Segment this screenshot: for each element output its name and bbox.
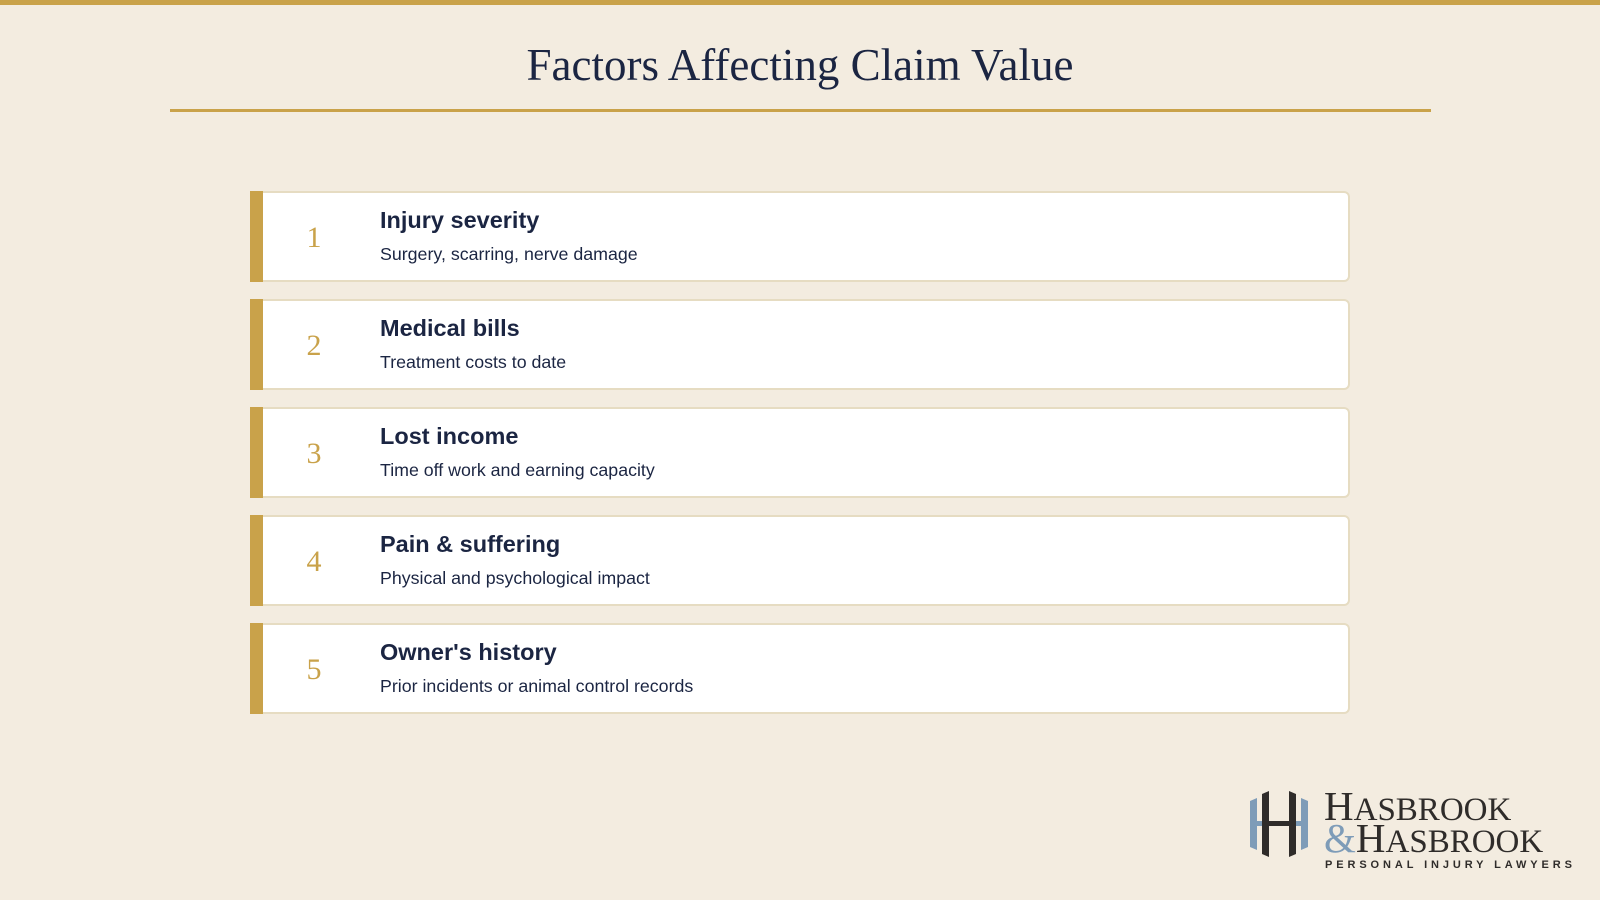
row 4 <box>250 515 1350 606</box>
row 2: Medical bills <box>380 315 520 341</box>
row 3: Lost income <box>380 423 518 449</box>
top accent bar <box>0 0 1600 5</box>
row 5: Owner's history <box>380 639 557 665</box>
row 3: Time off work and earning capacity <box>380 460 655 480</box>
logo text: HASBROOK <box>1324 783 1511 829</box>
row 5: 5 <box>306 653 322 686</box>
logo: &HASBROOK <box>1324 815 1543 861</box>
title underline <box>170 109 1431 112</box>
row 1: Surgery, scarring, nerve damage <box>380 244 638 264</box>
row 1: 1 <box>306 221 322 254</box>
row 4: 4 <box>306 545 322 578</box>
row 4: Pain & suffering <box>380 531 560 557</box>
row 3 <box>250 407 1350 498</box>
row 1: Injury severity <box>380 207 539 233</box>
icon: HH monogram <box>1250 791 1308 857</box>
logo: PERSONAL INJURY LAWYERS <box>1325 859 1576 871</box>
row 2: 2 <box>306 329 322 362</box>
row 2 <box>250 299 1350 390</box>
row 3: 3 <box>306 437 322 470</box>
title: Factors Affecting Claim Value <box>526 40 1074 90</box>
row 2: Treatment costs to date <box>380 352 566 372</box>
row 4: Physical and psychological impact <box>380 568 650 588</box>
row 5: Prior incidents or animal control records <box>380 676 693 696</box>
row 1 <box>250 191 1350 282</box>
row 5 <box>250 623 1350 714</box>
logo <box>1250 783 1576 871</box>
